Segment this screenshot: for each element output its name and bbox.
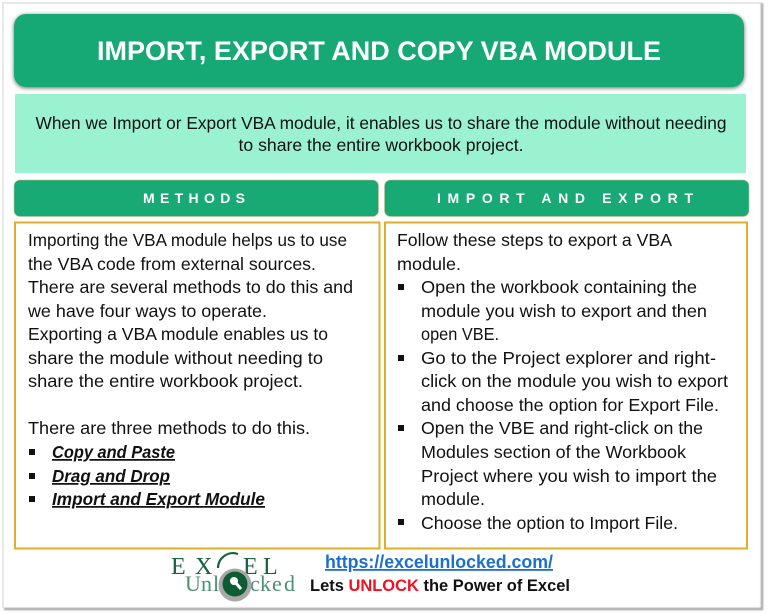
- logo: Excel Unlocked: cked: [250, 571, 295, 596]
- list: methods links: [29, 442, 265, 509]
- title: IMPORT, EXPORT AND COPY VBA MODULE: [97, 36, 661, 66]
- list: export and import steps: and choose the option for Export File.: [421, 395, 719, 415]
- intro text block: to share the entire workbook project.: [238, 135, 524, 155]
- list: export and import steps: module you wish to export and then: [421, 301, 707, 321]
- list: export and import steps: Open the workbook containing the: [421, 277, 697, 297]
- list: export and import steps: Open the VBE and right-click on the: [421, 418, 703, 438]
- heading: import and export: [384, 180, 749, 216]
- tagline: Lets UNLOCK the Power of Excel: [310, 576, 570, 595]
- panel: methods: the VBA code from external sources.: [28, 254, 316, 274]
- panel: methods: share the entire workbook project.: [28, 371, 303, 391]
- list: export and import steps: [398, 277, 728, 533]
- panel: methods: There are three methods to do this.: [28, 418, 310, 438]
- panel: import and export: [385, 222, 747, 548]
- panel: methods: Importing the VBA module helps us to use: [28, 230, 347, 250]
- logo: Excel Unlocked: Unl: [185, 571, 219, 596]
- panel: import and export: Follow these steps to export a VBA: [397, 230, 672, 250]
- list: export and import steps: Choose the option to Import File.: [421, 513, 678, 533]
- list: export and import steps: Go to the Project explorer and right-: [421, 348, 716, 368]
- list: methods links: Drag and Drop: [52, 466, 170, 486]
- panel: methods: share the module without needing to: [28, 348, 323, 368]
- title: [14, 14, 744, 87]
- logo: Excel Unlocked: EXEL: [171, 554, 278, 580]
- list: methods links: Import and Export Module: [52, 489, 265, 509]
- panel: methods: [15, 222, 380, 548]
- list: export and import steps: Modules section of the Workbook: [421, 442, 686, 462]
- list: export and import steps: click on the module you wish to export: [421, 371, 728, 391]
- panel: methods: Exporting a VBA module enables us to: [28, 324, 328, 344]
- link: https://excelunlocked.com/: [325, 552, 553, 572]
- panel: methods: There are several methods to do this and: [28, 277, 353, 297]
- heading: methods: [14, 180, 378, 216]
- logo: Excel Unlocked: [171, 553, 295, 602]
- heading: methods: METHODS: [143, 190, 245, 206]
- panel: methods: we have four ways to operate.: [27, 301, 267, 321]
- intro text block: [15, 94, 746, 173]
- list: export and import steps: module.: [421, 489, 485, 509]
- intro text block: When we Import or Export VBA module, it enables us to share the module without needing: [36, 113, 726, 133]
- list: export and import steps: open VBE.: [421, 324, 499, 344]
- list: export and import steps: Project where you wish to import the: [421, 466, 717, 486]
- list: methods links: Copy and Paste: [52, 442, 175, 462]
- panel: import and export: module.: [397, 254, 461, 274]
- heading: import and export: IMPORT AND EXPORT: [437, 190, 693, 206]
